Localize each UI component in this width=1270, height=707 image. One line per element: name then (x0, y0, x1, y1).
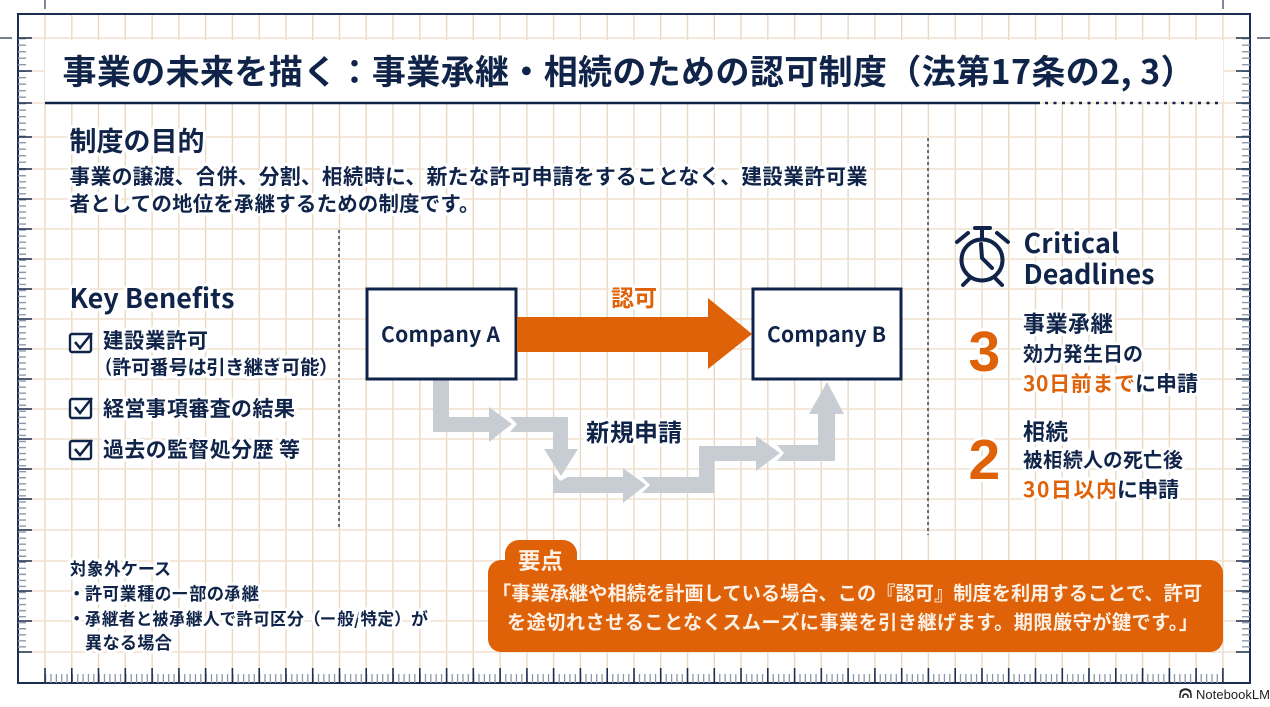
new application label: 新規申請 (586, 413, 682, 448)
section: deadlines (957, 222, 1198, 504)
company A box (367, 289, 516, 379)
deadline: inheritance: 2 (968, 428, 1000, 492)
excluded cases note: ・ (68, 606, 85, 631)
benefit 2: 経営事項審査の結果 (103, 392, 295, 423)
excluded cases note: 承継者と被承継人で許可区分（一般/特定）が (85, 605, 428, 630)
NotebookLM mark: NotebookLM (1196, 687, 1270, 702)
title band (45, 40, 1223, 102)
deadline: business succession (968, 307, 1198, 398)
icon: alarm clock (957, 228, 1008, 285)
section: key benefits (70, 277, 338, 464)
benefit 1 (70, 325, 338, 380)
deadlines heading: Deadlines (1024, 253, 1154, 292)
deadline: inheritance: 相続 (1023, 415, 1068, 447)
deadline: business succession: 事業承継 (1023, 307, 1113, 339)
purpose body (70, 161, 868, 217)
approval label: 認可 (611, 279, 657, 313)
excluded cases note: 許可業種の一部の承継 (85, 581, 259, 606)
deadlines heading (1024, 222, 1154, 292)
orange approval arrow (517, 298, 752, 369)
excluded cases note: ・ (68, 581, 85, 606)
purpose body: 者としての地位を承継するための制度です。 (70, 187, 480, 217)
deadline: inheritance: 被相続人の死亡後 (1023, 444, 1183, 473)
deadline: business succession: 3 (968, 320, 1000, 384)
callout tab label: 要点 (518, 544, 563, 576)
deadline: inheritance: 30日以内 (1023, 474, 1117, 504)
purpose body: 事業の譲渡、合併、分割、相続時に、新たな許可申請をすることなく、建設業許可業 (70, 161, 868, 191)
excluded cases note (68, 555, 428, 655)
title: 事業の未来を描く：事業承継・相続のための認可制度（法第17条の2, 3） (62, 45, 1194, 94)
deadline: business succession: 効力発生日の (1023, 338, 1143, 367)
deadlines heading: Critical (1024, 222, 1120, 261)
deadline: inheritance: に申請 (1117, 474, 1179, 504)
deadline: inheritance (968, 415, 1183, 504)
key benefits heading: Key Benefits (70, 277, 234, 316)
benefit 3: 過去の監督処分歴 等 (103, 434, 300, 464)
deadline: business succession: 30日前まで (1023, 368, 1135, 398)
company B box: Company B (767, 319, 886, 349)
title underline (45, 102, 1223, 104)
benefit 1: （許可番号は引き継ぎ可能） (94, 351, 338, 380)
callout text (492, 578, 1202, 635)
gray stepped arrows (433, 380, 844, 503)
callout text: 「事業承継や相続を計画している場合、この『認可』制度を利用することで、許可 (492, 578, 1202, 606)
benefit 1: 建設業許可 (103, 325, 208, 355)
purpose heading: 制度の目的 (70, 120, 204, 159)
company B box (753, 289, 901, 379)
section: purpose (70, 120, 868, 217)
callout text: を途切れさせることなくスムーズに事業を引き継げます。期限厳守が鍵です。」 (507, 607, 1198, 635)
key point callout (488, 540, 1223, 652)
excluded cases note: 対象外ケース (70, 555, 171, 580)
diagram: transfer flow (367, 279, 901, 503)
company A box: Company A (381, 319, 501, 349)
excluded cases note: 異なる場合 (85, 630, 173, 655)
deadline: business succession: に申請 (1135, 368, 1198, 398)
